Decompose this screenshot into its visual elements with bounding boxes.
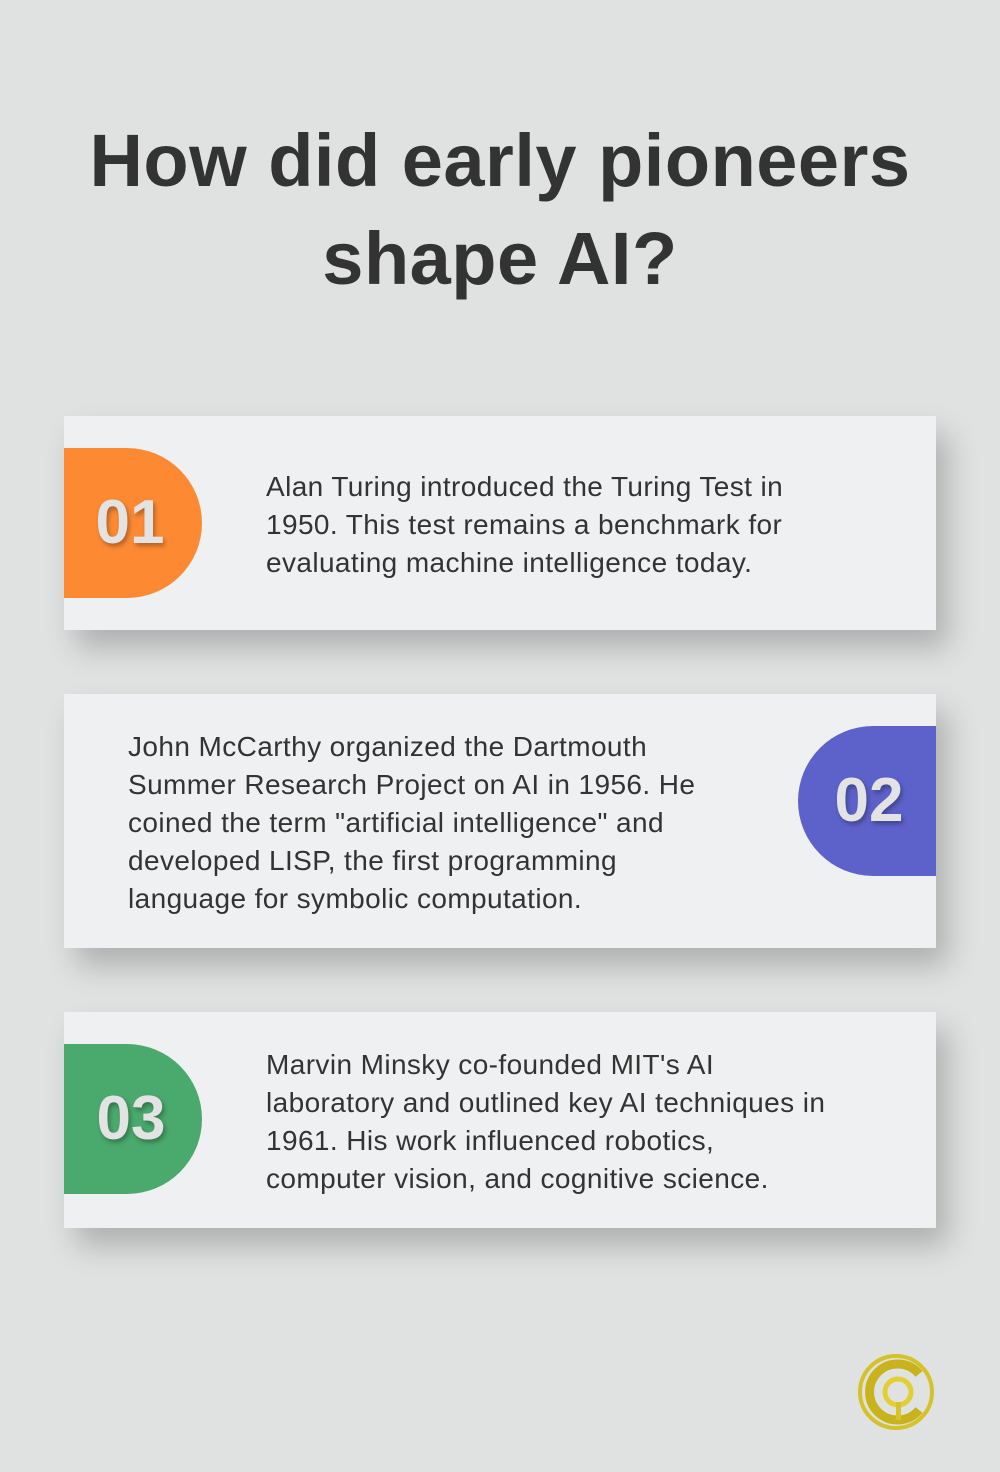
text 2: Summer Research Project on AI in 1956. He [128,769,695,800]
card 2 [64,694,936,948]
badge 02: 02 [835,766,903,835]
title [89,119,911,300]
text 1 [266,471,783,578]
text 1: Alan Turing introduced the Turing Test in [266,471,783,502]
text 2: John McCarthy organized the Dartmouth [128,731,647,762]
title: How did early pioneers [89,119,911,202]
title: shape AI? [322,217,678,300]
text 3: computer vision, and cognitive science. [266,1163,769,1194]
text 2 [128,731,695,914]
text 3: 1961. His work influenced robotics, [266,1125,714,1156]
text 1: evaluating machine intelligence today. [266,547,752,578]
badge 01: 01 [96,488,164,557]
text 2: developed LISP, the first programming [128,845,617,876]
text 1: 1950. This test remains a benchmark for [266,509,782,540]
card 1 [64,416,936,630]
logo [858,1354,934,1430]
text 3: laboratory and outlined key AI techniques in [266,1087,825,1118]
text 3: Marvin Minsky co-founded MIT's AI [266,1049,714,1080]
card 3 [64,1012,936,1228]
badge 03 [64,1044,202,1194]
badge 03: 03 [97,1084,165,1153]
text 3 [266,1049,825,1194]
badge 02 [798,726,936,876]
text 2: language for symbolic computation. [128,883,582,914]
text 2: coined the term "artificial intelligence" and [128,807,664,838]
badge 01 [64,448,202,598]
